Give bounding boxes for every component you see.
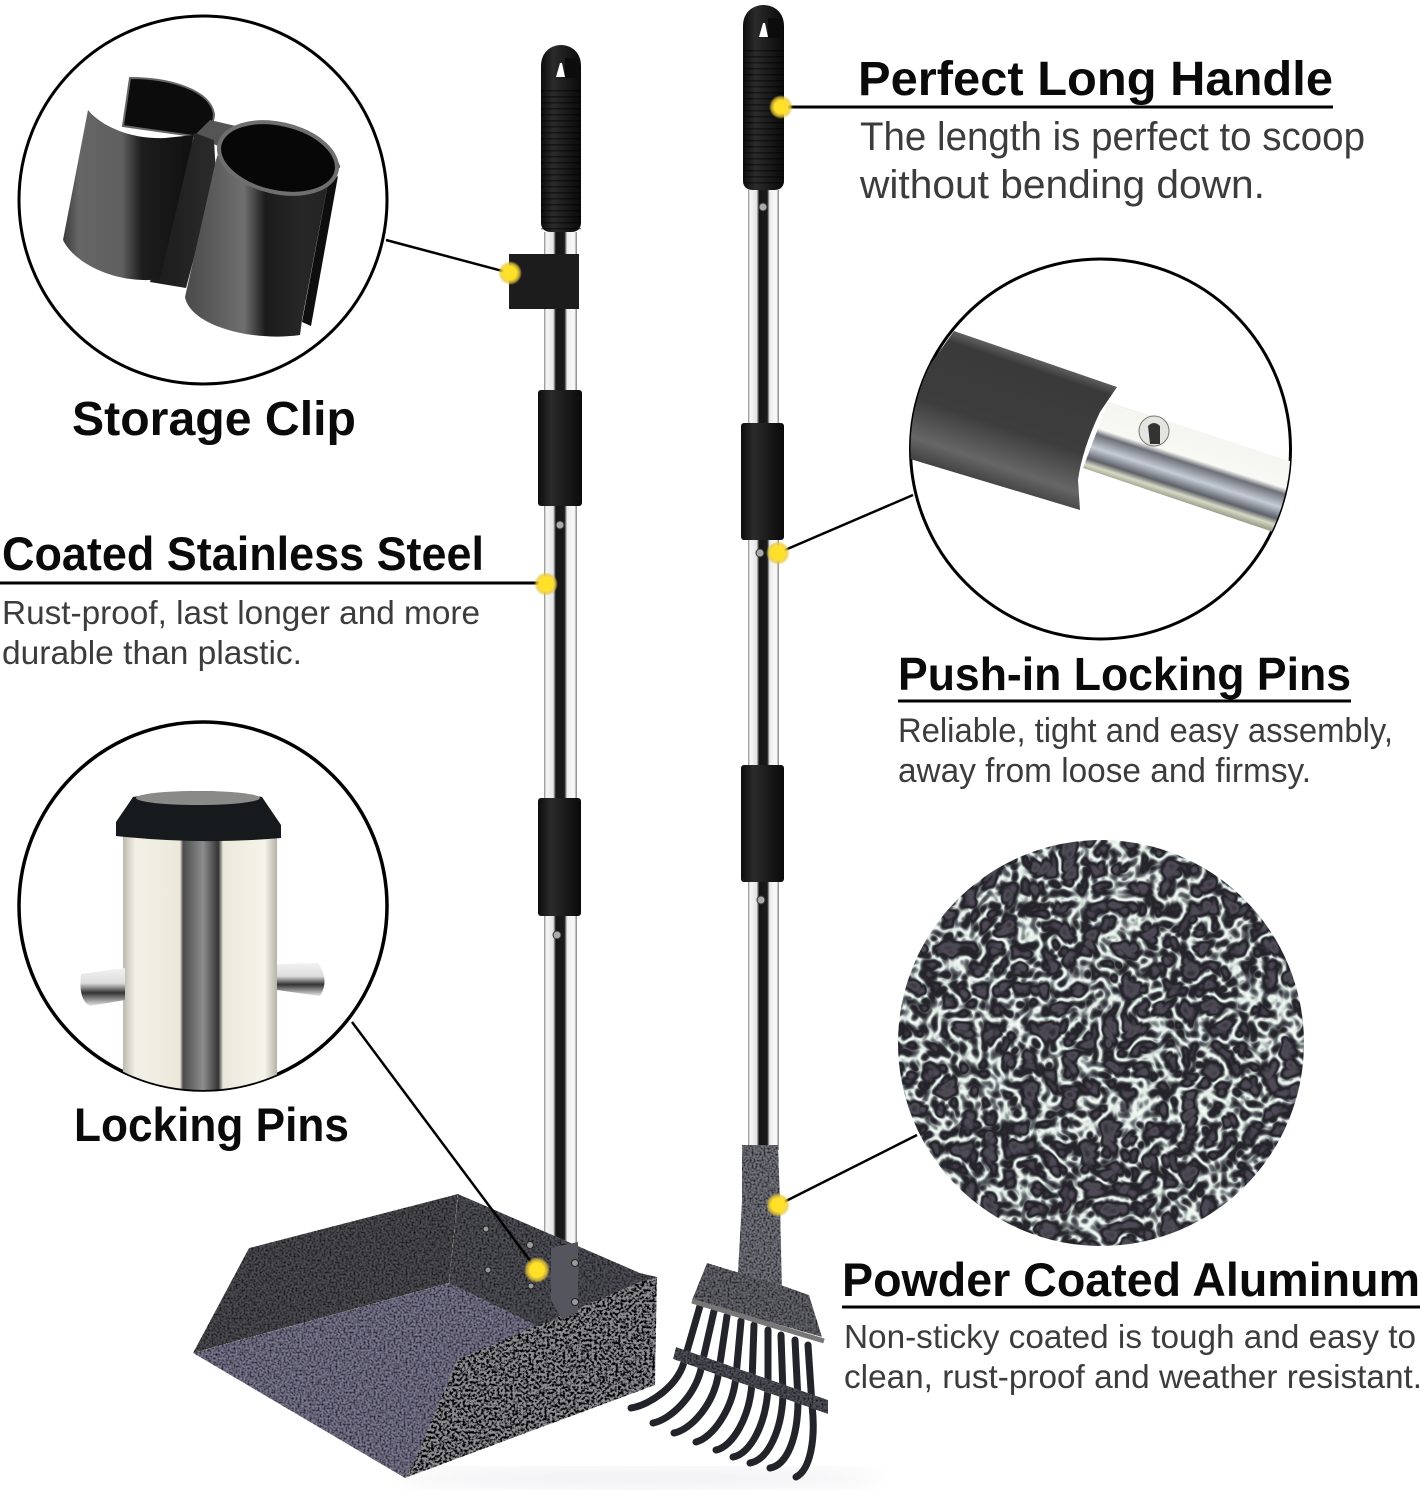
scoop floor	[193, 1283, 535, 1478]
leader underline	[781, 106, 1333, 108]
rake upper sleeve	[741, 423, 784, 540]
heading underline	[898, 700, 1351, 702]
rake rivet two	[756, 549, 764, 557]
body text: Rust-proof, last longer and more	[2, 594, 480, 631]
heading: Powder Coated Aluminum: Powder Coated Aluminum	[842, 1253, 1420, 1306]
rake tines	[631, 1306, 813, 1477]
leader underline	[0, 582, 546, 584]
detail circle: pole end	[19, 722, 387, 1095]
yellow marker	[534, 572, 558, 596]
heading: Perfect Long Handle: Perfect Long Handle	[858, 53, 1333, 106]
left pole handle grip	[541, 45, 581, 232]
connector line	[778, 1135, 917, 1205]
callout: push-in locking pins	[766, 259, 1393, 790]
connector line	[386, 240, 510, 273]
rake rivet three	[757, 896, 765, 904]
rake handle hang hole	[759, 23, 768, 37]
rake lower band	[673, 1347, 828, 1414]
scoop front wall	[405, 1277, 657, 1478]
rake head plate	[692, 1263, 822, 1337]
callout: perfect long handle	[769, 53, 1365, 207]
rivet one	[556, 521, 564, 529]
circle outline	[19, 16, 387, 384]
upper sleeve	[538, 390, 582, 506]
rake head	[631, 1145, 828, 1477]
body text: Reliable, tight and easy assembly,	[898, 712, 1393, 750]
lower sleeve	[538, 798, 581, 916]
yellow marker	[769, 95, 793, 119]
rake pole	[741, 5, 784, 1150]
detail circle: clip	[19, 16, 387, 384]
handle notch	[565, 58, 577, 78]
detail circle: powder coat texture	[890, 830, 1315, 1255]
grip ribs	[541, 90, 581, 230]
yellow marker	[524, 1257, 550, 1283]
detail circle: tube and pin	[900, 259, 1296, 639]
rake rivet one	[759, 203, 767, 211]
rake grip ribs	[743, 50, 784, 188]
rake handle grip	[743, 5, 784, 190]
yellow marker	[766, 541, 790, 565]
body text: Non-sticky coated is tough and easy to	[844, 1318, 1416, 1355]
scoop mount plate	[551, 1242, 578, 1320]
circle outline	[19, 722, 387, 1090]
body text: away from loose and firmsy.	[898, 752, 1311, 790]
callout: powder coated aluminum	[766, 830, 1422, 1395]
circle outline	[910, 259, 1290, 639]
scoop left wall	[193, 1194, 458, 1353]
dustpan scoop	[193, 1194, 657, 1478]
callout: storage clip	[19, 16, 522, 446]
pole end illustration	[80, 791, 325, 1095]
connector line	[778, 495, 913, 553]
body text: without bending down.	[859, 163, 1265, 207]
heading underline	[842, 1306, 1420, 1308]
body text: durable than plastic.	[2, 634, 302, 671]
heading: Locking Pins: Locking Pins	[74, 1098, 349, 1151]
yellow marker	[766, 1193, 790, 1217]
connector line	[352, 1022, 537, 1270]
scoop bolts	[483, 1226, 578, 1306]
rake lower sleeve	[741, 765, 784, 882]
rake steel bar	[692, 1301, 824, 1341]
body text: clean, rust-proof and weather resistant.	[844, 1358, 1422, 1395]
rake handle notch	[768, 18, 780, 38]
rivet two	[553, 931, 561, 939]
heading: Push-in Locking Pins: Push-in Locking Pins	[898, 648, 1351, 700]
storage clip on pole	[509, 254, 579, 309]
heading: Storage Clip: Storage Clip	[72, 393, 356, 446]
rake pole shaft	[748, 190, 779, 1150]
callout: coated stainless steel	[0, 527, 558, 671]
yellow marker	[498, 261, 522, 285]
heading: Coated Stainless Steel: Coated Stainless Steel	[2, 527, 484, 580]
callout: locking pins	[19, 722, 550, 1283]
body text: The length is perfect to scoop	[860, 115, 1365, 159]
handle hang hole	[556, 63, 565, 77]
rake socket tube	[737, 1145, 782, 1290]
left pole shaft	[544, 232, 577, 1312]
scoop back wall	[449, 1194, 657, 1335]
tube illustration	[900, 331, 1296, 535]
left scoop pole	[509, 45, 582, 1312]
clip illustration	[63, 78, 344, 337]
